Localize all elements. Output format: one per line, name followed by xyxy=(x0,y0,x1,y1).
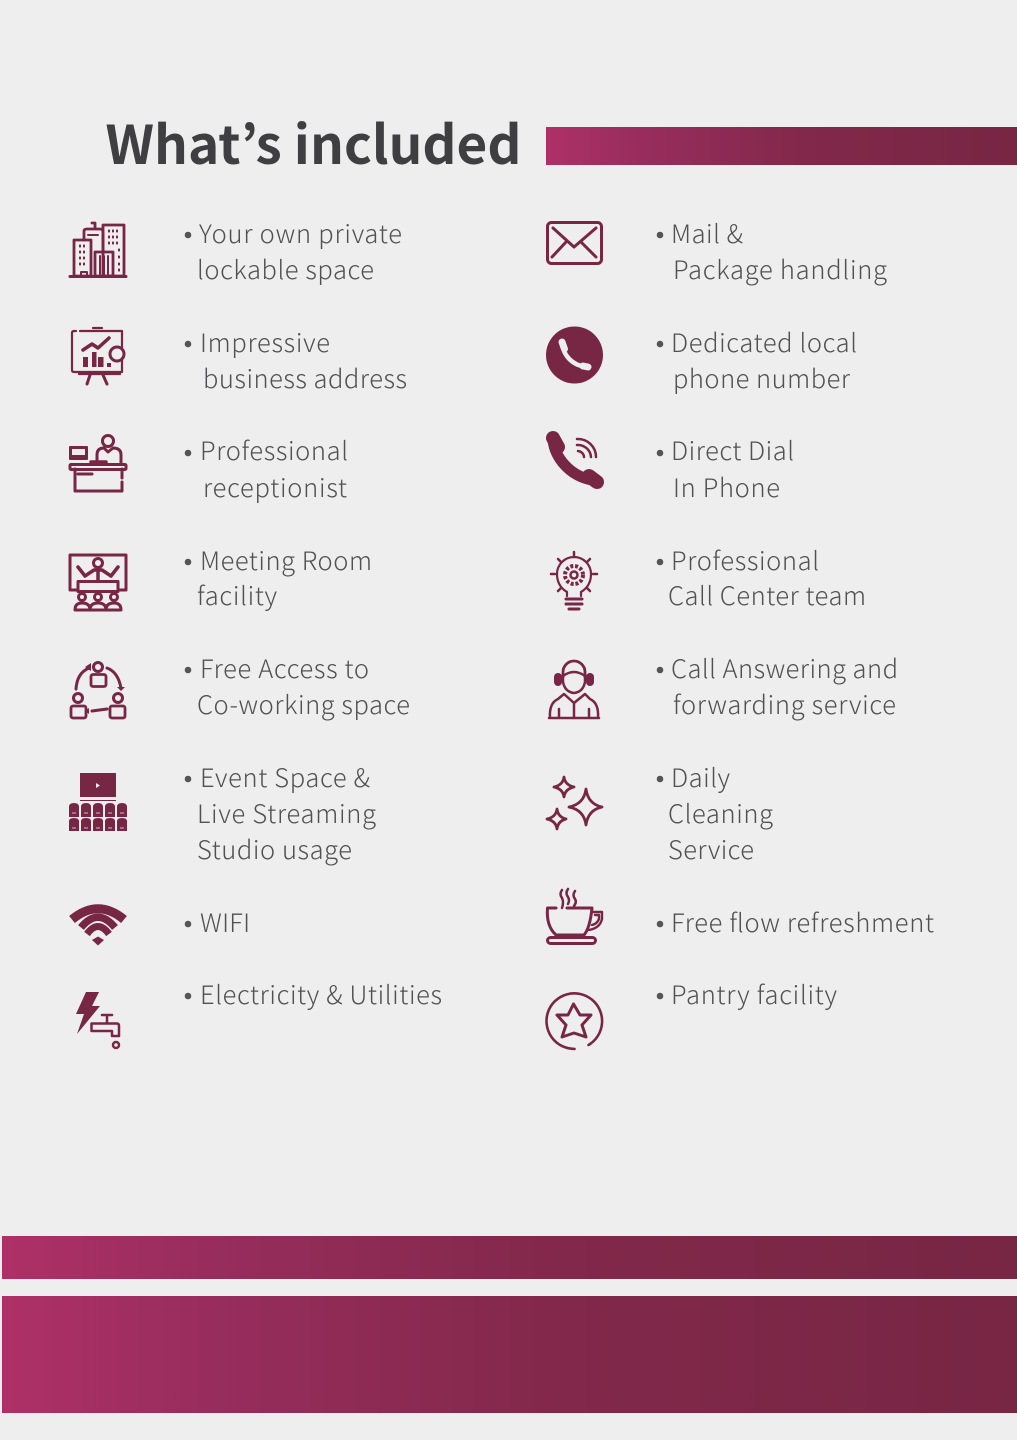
icon: receptionist at desk xyxy=(69,436,126,491)
icon: coffee cup xyxy=(547,889,602,944)
text: impressive business address: Impressive xyxy=(200,323,330,360)
text: dedicated local phone number xyxy=(657,323,857,396)
text: event space live streaming studio: Event Space & xyxy=(200,758,371,795)
text: mail and package handling: Package handling xyxy=(673,250,887,287)
text: event space live streaming studio: Live Streaming xyxy=(197,794,376,831)
text: professional receptionist xyxy=(185,431,348,505)
text: impressive business address: business address xyxy=(203,359,407,396)
text: impressive business address xyxy=(185,323,407,396)
text: call answering forwarding: forwarding service xyxy=(673,685,896,722)
text: private lockable space: lockable space xyxy=(197,250,374,287)
text: event space live streaming studio xyxy=(185,758,376,867)
text: daily cleaning service: Service xyxy=(668,830,754,867)
text: meeting room facility xyxy=(185,541,372,613)
text: daily cleaning service: Daily xyxy=(671,758,730,795)
icon: event space screen and seats xyxy=(69,773,127,831)
title: What’s included xyxy=(106,104,522,180)
icon: presentation board xyxy=(72,328,124,384)
text: event space live streaming studio: Studio usage xyxy=(197,830,352,867)
icon: idea bulb with gear xyxy=(551,552,597,609)
text: electricity and utilities: Electricity & Utilities xyxy=(200,975,442,1012)
text: direct dial in phone xyxy=(657,431,794,505)
icon: mail envelope xyxy=(548,222,602,264)
text: free access co-working space xyxy=(185,649,410,722)
text: mail and package handling: Mail & xyxy=(671,214,744,251)
icon: meeting room xyxy=(70,555,126,610)
text: private lockable space xyxy=(185,214,402,287)
icon: office buildings xyxy=(70,223,126,276)
icon: star badge xyxy=(546,993,602,1049)
icon: electricity and tap xyxy=(76,992,119,1048)
text: professional receptionist: Professional xyxy=(200,431,348,468)
text: free access co-working space: Co-working space xyxy=(197,685,410,722)
text: pantry facility: Pantry facility xyxy=(671,975,838,1012)
text: call answering forwarding: Call Answering and xyxy=(671,649,898,686)
text: call answering forwarding xyxy=(657,649,898,722)
footer gradient bar: upper xyxy=(2,1236,1017,1279)
text: meeting room facility: facility xyxy=(197,576,278,613)
text: daily cleaning service: Cleaning xyxy=(668,794,773,831)
icon: phone in circle xyxy=(546,326,603,384)
text: mail and package handling xyxy=(657,214,887,287)
text: private lockable space: Your own private xyxy=(199,214,402,251)
title gradient bar xyxy=(546,127,1017,165)
icon: direct dial phone xyxy=(553,438,597,482)
text: professional call center team: Professional xyxy=(671,541,819,578)
text: wifi: WIFI xyxy=(200,903,250,940)
text: professional receptionist: receptionist xyxy=(203,468,347,505)
icon: sparkles xyxy=(547,777,602,829)
text: daily cleaning service xyxy=(657,758,773,867)
text: dedicated local phone number: phone number xyxy=(673,359,851,396)
text: professional call center team xyxy=(657,541,866,613)
icon: call agent with headset xyxy=(549,661,599,718)
footer gradient bar: lower xyxy=(2,1296,1017,1413)
text: direct dial in phone: Direct Dial xyxy=(671,431,794,468)
text: free access co-working space: Free Access to xyxy=(200,649,369,686)
text: free flow refreshment: Free flow refreshment xyxy=(671,903,934,940)
icon: wifi xyxy=(72,909,124,946)
icon: co-working circle xyxy=(71,662,125,718)
text: professional call center team: Call Center team xyxy=(668,576,866,613)
text: meeting room facility: Meeting Room xyxy=(200,541,372,578)
text: dedicated local phone number: Dedicated local xyxy=(671,323,857,360)
text: direct dial in phone: In Phone xyxy=(673,468,780,505)
